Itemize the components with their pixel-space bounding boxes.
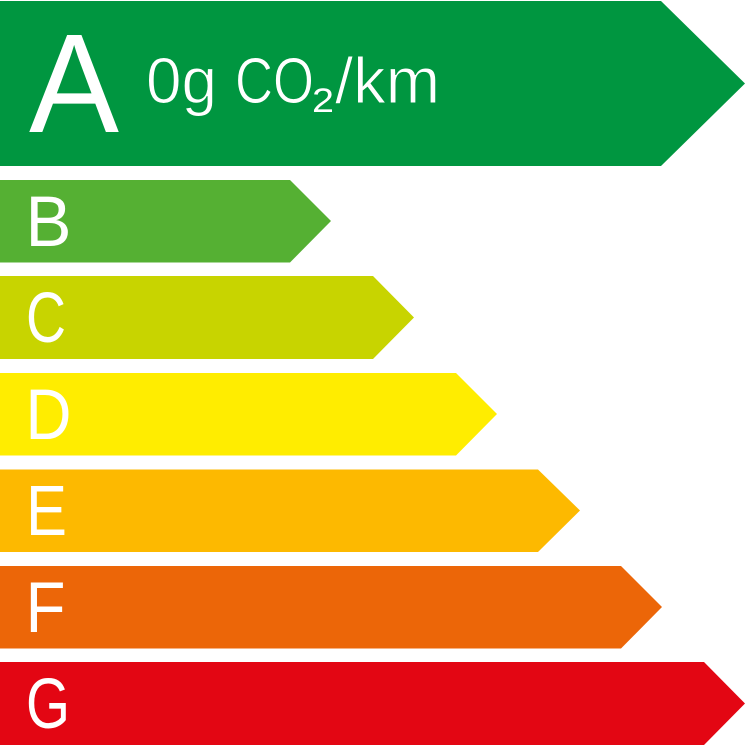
band D: D (26, 376, 72, 455)
band G: G (26, 665, 70, 744)
band G (0, 662, 745, 745)
emissions label: 2 (312, 82, 334, 120)
band E (0, 470, 580, 552)
letter A: A (29, 4, 119, 162)
emissions label (146, 44, 440, 120)
emissions label: /km (335, 44, 440, 117)
band E: E (26, 472, 67, 551)
band F: F (26, 569, 66, 648)
band B: B (26, 183, 72, 262)
band B (0, 180, 331, 262)
band C: C (26, 279, 66, 358)
band C (0, 276, 414, 359)
band A: 0g CO2/km (0, 1, 745, 166)
emissions label: 0g (146, 44, 217, 117)
band D (0, 373, 497, 456)
emissions label: CO (235, 44, 314, 117)
band F (0, 566, 662, 648)
